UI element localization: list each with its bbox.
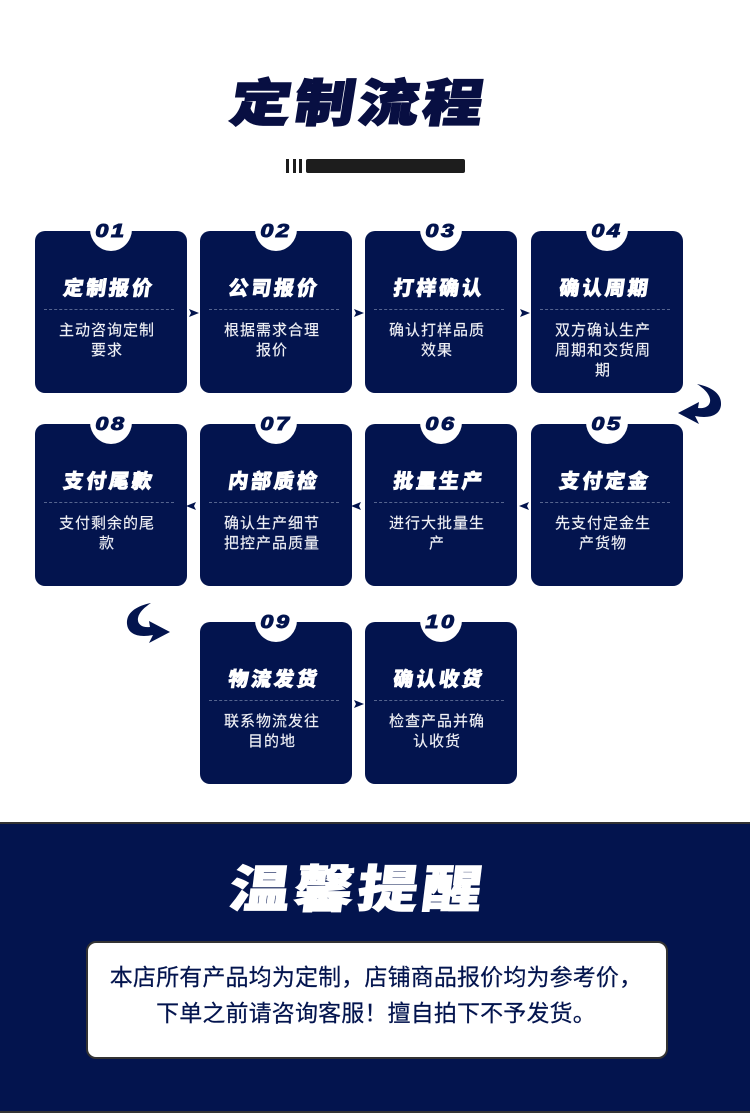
step card 04: 周期和交货周 (555, 342, 651, 359)
step card 05: 支付定金 (558, 471, 652, 493)
heading: 温馨提醒: 温馨提醒 (227, 861, 490, 918)
title underline bar (286, 159, 465, 173)
step card 07: 确认生产细节 (224, 515, 320, 532)
step card 04: 确认周期 (558, 278, 652, 300)
step card 09: 联系物流发往 (224, 713, 320, 730)
step card 04: 期 (595, 362, 611, 379)
step card 05: 产货物 (579, 535, 627, 552)
step card 06: 批量生产 (392, 471, 486, 493)
title: 定制流程: 定制流程 (227, 75, 492, 132)
step card 03 (365, 231, 517, 393)
step card 07: 内部质检 (227, 471, 321, 493)
step card 08 (35, 424, 187, 586)
step card 08: 款 (99, 535, 115, 552)
step card 04: 双方确认生产 (555, 322, 651, 339)
step card 03: 打样确认 (392, 278, 486, 300)
arrow 02 to 03 (354, 309, 364, 317)
step card 09: 物流发货 (227, 669, 321, 691)
arrow 01 to 02 (189, 309, 199, 317)
step card 06: 产 (429, 535, 445, 552)
arrow 07 to 08 (187, 502, 196, 510)
step card 08: 08 (95, 414, 127, 434)
step card 08: 支付尾款 (62, 471, 156, 493)
step card 01: 主动咨询定制 (59, 322, 155, 339)
step card 10 (365, 622, 517, 784)
step card 10: 确认收货 (392, 669, 486, 691)
step card 01: 01 (95, 221, 127, 241)
step card 04 (531, 231, 683, 393)
panel: reminder section (0, 822, 750, 1113)
step card 07 (200, 424, 352, 586)
step card 09: 目的地 (248, 733, 296, 750)
step card 09 (200, 622, 352, 784)
step card 06: 进行大批量生 (389, 515, 485, 532)
step card 06 (365, 424, 517, 586)
step card 03: 确认打样品质 (389, 322, 485, 339)
step card 05: 05 (591, 414, 623, 434)
step card 05 (531, 424, 683, 586)
step card 02: 根据需求合理 (224, 322, 320, 339)
step card 01: 要求 (91, 342, 123, 359)
step card 10: 10 (425, 612, 457, 632)
step card 10: 检查产品并确 (389, 713, 485, 730)
step card 03: 03 (425, 221, 457, 241)
step card 04: 04 (591, 221, 623, 241)
step card 02: 02 (260, 221, 292, 241)
arrow 06 to 07 (352, 502, 361, 510)
step card 07: 把控产品质量 (224, 535, 320, 552)
step card 08: 支付剩余的尾 (59, 515, 155, 532)
step card 03: 效果 (421, 342, 453, 359)
notice text: 下单之前请咨询客服！擅自拍下不予发货。 (156, 1000, 596, 1026)
step card 05: 先支付定金生 (555, 515, 651, 532)
step card 02 (200, 231, 352, 393)
step card 10: 认收货 (413, 733, 461, 750)
step card 07: 07 (260, 414, 292, 434)
notice box (86, 941, 668, 1059)
arrow 09 to 10 (354, 700, 364, 708)
step card 01: 定制报价 (62, 278, 156, 300)
step card 02: 公司报价 (227, 278, 321, 300)
step card 02: 报价 (256, 342, 288, 359)
step card 01 (35, 231, 187, 393)
arrow 05 to 06 (519, 502, 529, 510)
notice text (110, 964, 642, 1026)
step card 06: 06 (425, 414, 457, 434)
notice text: 本店所有产品均为定制，店铺商品报价均为参考价， (110, 964, 642, 990)
arrow 03 to 04 (520, 309, 530, 317)
step card 09: 09 (260, 612, 292, 632)
